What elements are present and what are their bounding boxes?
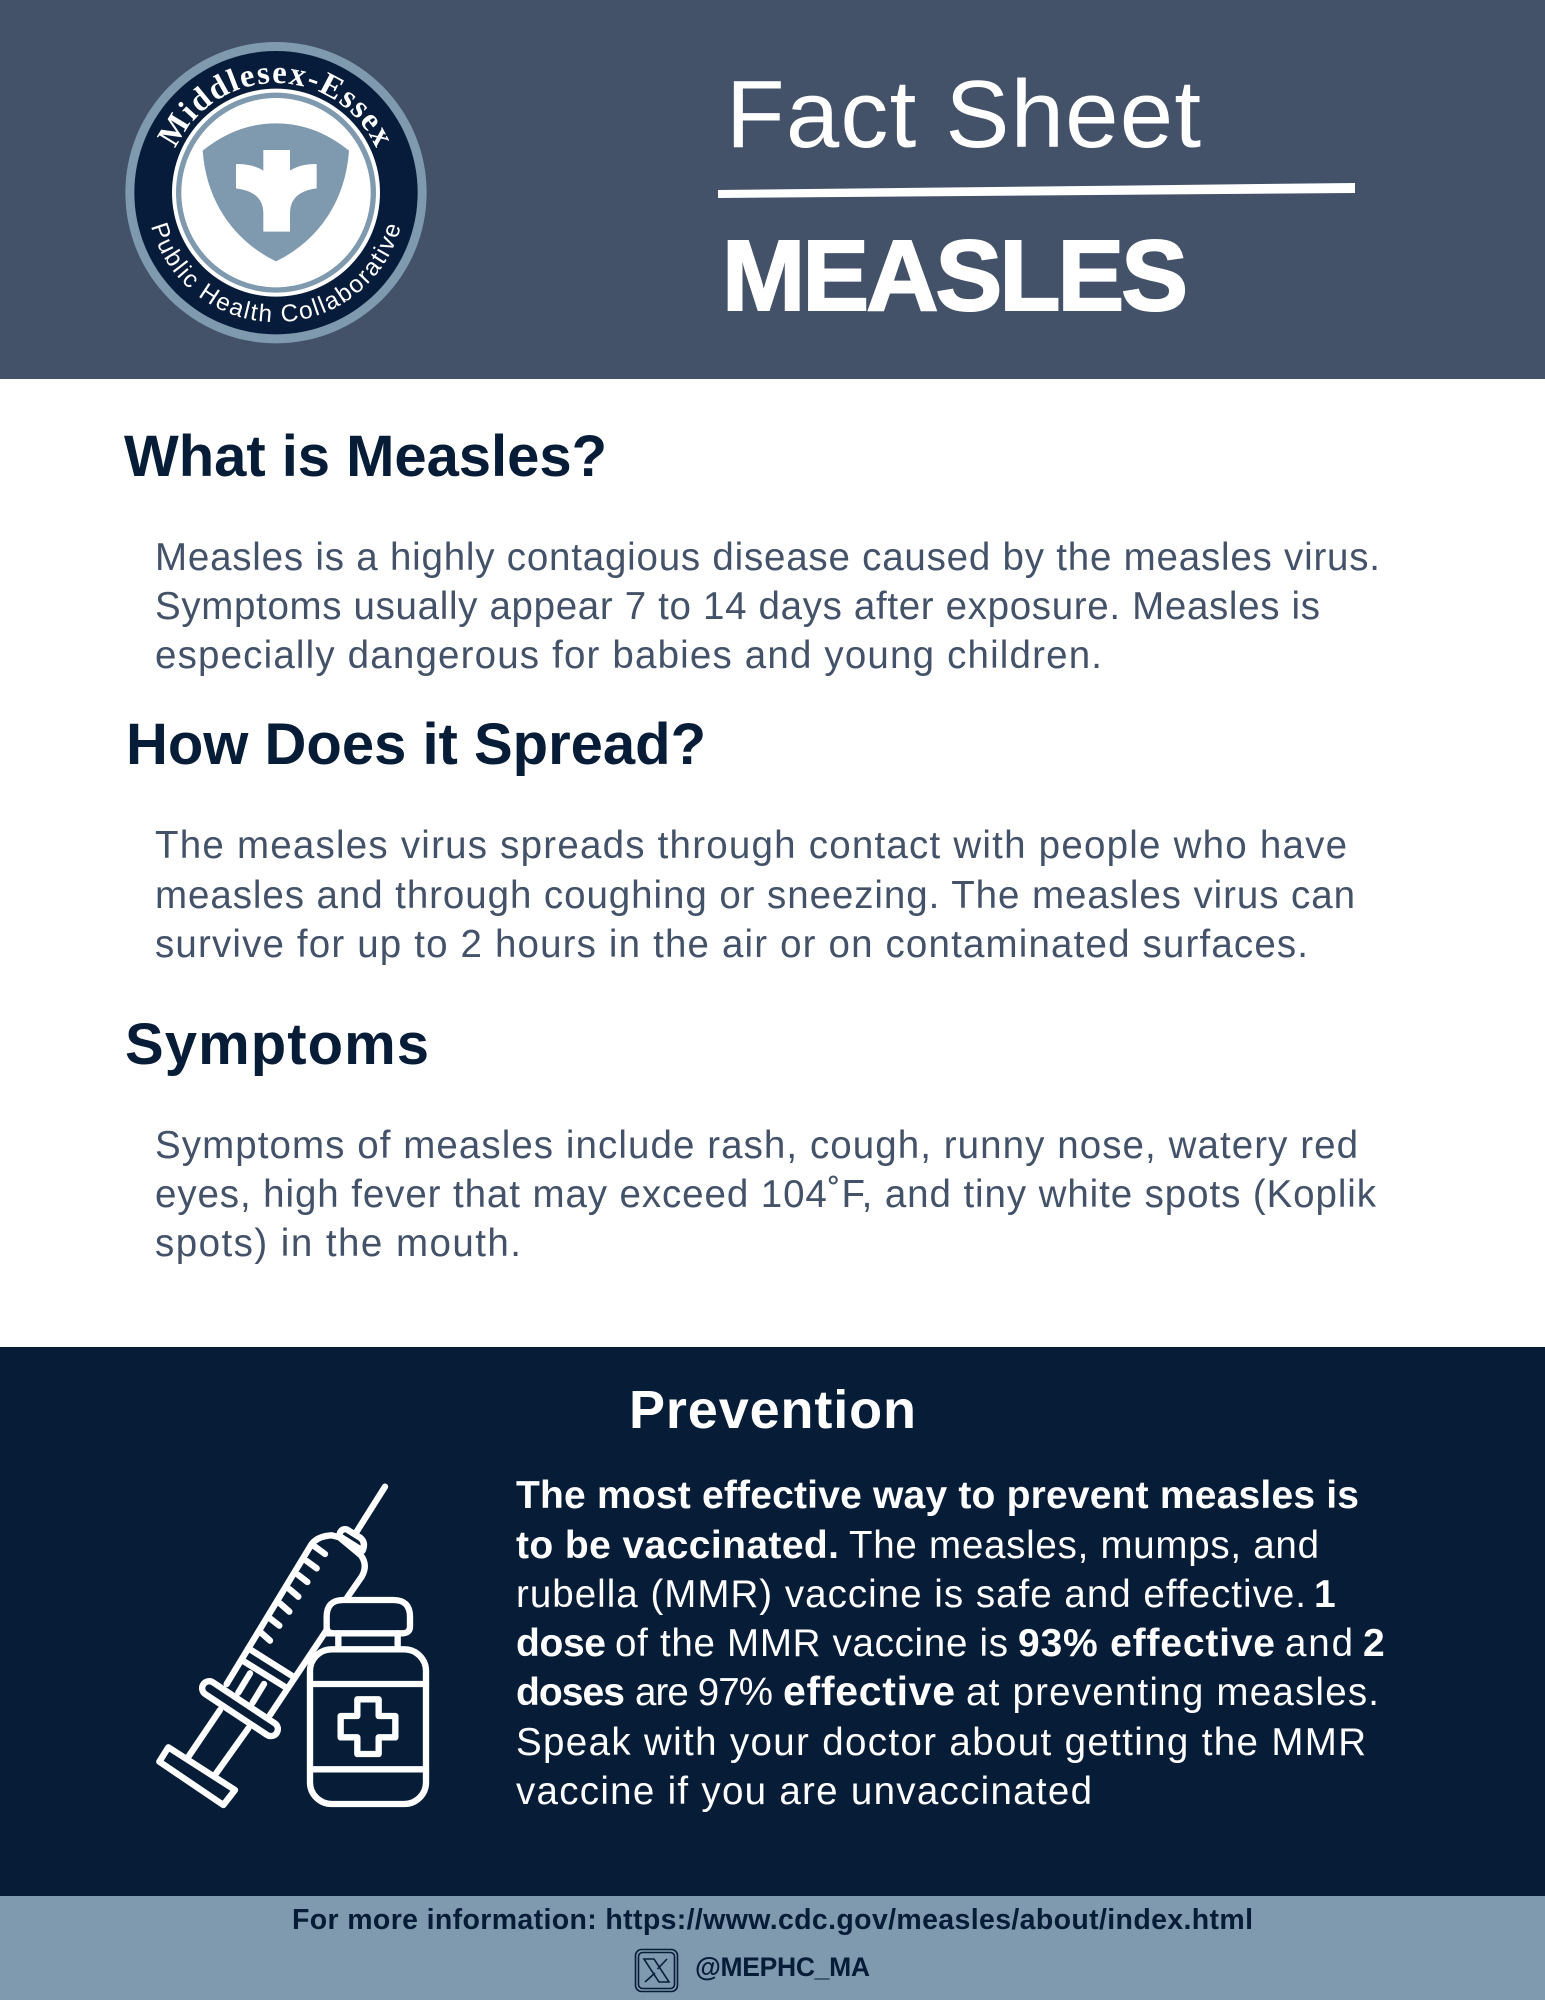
paragraph: The measles virus spreads through contact with people who have — [155, 824, 1347, 867]
logo: Middlesex-Essex Public Health Collaborative: Middlesex-Essex — [156, 68, 390, 148]
paragraph: Measles is a highly contagious disease caused by the measles virus. — [155, 536, 1380, 579]
section: Symptoms — [125, 1012, 1377, 1265]
paragraph: survive for up to 2 hours in the air or on contaminated surfaces. — [155, 923, 1308, 966]
paragraph — [155, 536, 1380, 677]
heading: Symptoms — [125, 1012, 429, 1077]
paragraph: prevention text: 2 — [1363, 1622, 1385, 1665]
paragraph: prevention text: 1 — [1314, 1573, 1336, 1616]
panel: header — [0, 0, 1545, 379]
heading: How Does it Spread? — [126, 712, 706, 777]
paragraph: prevention text: doses — [516, 1671, 625, 1714]
paragraph: prevention text: 93% effective — [1018, 1622, 1275, 1665]
paragraph: prevention text: Speak with your doctor about getting the MMR — [516, 1721, 1366, 1764]
paragraph: prevention text: The most effective way to prevent measles is — [516, 1474, 1359, 1517]
icon: syringe and vial — [159, 1487, 426, 1805]
paragraph: eyes, high fever that may exceed 104˚F, and tiny white spots (Koplik — [155, 1173, 1377, 1216]
paragraph — [155, 824, 1355, 966]
logo: Middlesex-Essex Public Health Collaborative — [125, 42, 427, 344]
section: How Does it Spread — [126, 712, 1355, 966]
paragraph: prevention text: vaccine if you are unvaccinated — [516, 1770, 1092, 1813]
paragraph: prevention text: rubella (MMR) vaccine is safe and effective. — [516, 1573, 1306, 1616]
paragraph: Symptoms usually appear 7 to 14 days after exposure. Measles is — [155, 585, 1320, 628]
title: MEASLES: MEASLES — [722, 220, 1188, 332]
paragraph: spots) in the mouth. — [155, 1222, 521, 1265]
paragraph: prevention text: dose — [516, 1622, 606, 1665]
paragraph: prevention text: effective — [783, 1668, 955, 1714]
heading: What is Measles? — [124, 424, 607, 489]
panel: footer — [0, 1896, 1545, 2000]
paragraph: prevention text: are 97% — [635, 1671, 773, 1714]
paragraph: especially dangerous for babies and young children. — [155, 634, 1102, 677]
paragraph: prevention text: to be vaccinated. — [516, 1524, 839, 1567]
paragraph: prevention text — [516, 1474, 1385, 1813]
paragraph: measles and through coughing or sneezing. The measles virus can — [155, 874, 1355, 917]
more information link: For more information: https://www.cdc.gov/measles/about/index.html — [292, 1904, 1253, 1936]
paragraph — [155, 1124, 1377, 1265]
paragraph: prevention text: of the MMR vaccine is — [615, 1622, 1008, 1665]
handle: @MEPHC_MA — [695, 1952, 870, 1982]
icon: X logo — [636, 1950, 678, 1992]
heading: Prevention: Prevention — [629, 1380, 916, 1440]
section: What is Measles — [124, 424, 1380, 677]
title: Fact Sheet: Fact Sheet — [726, 61, 1201, 168]
paragraph: prevention text: and — [1285, 1622, 1353, 1665]
paragraph: Symptoms of measles include rash, cough, runny nose, watery red — [155, 1124, 1358, 1167]
panel: prevention — [0, 1347, 1545, 1896]
paragraph: prevention text: The measles, mumps, and — [849, 1524, 1319, 1567]
paragraph: prevention text: at preventing measles. — [966, 1671, 1379, 1714]
title underline — [718, 183, 1355, 198]
logo: Middlesex-Essex Public Health Collaborative: Public Health Collaborative — [151, 222, 400, 322]
